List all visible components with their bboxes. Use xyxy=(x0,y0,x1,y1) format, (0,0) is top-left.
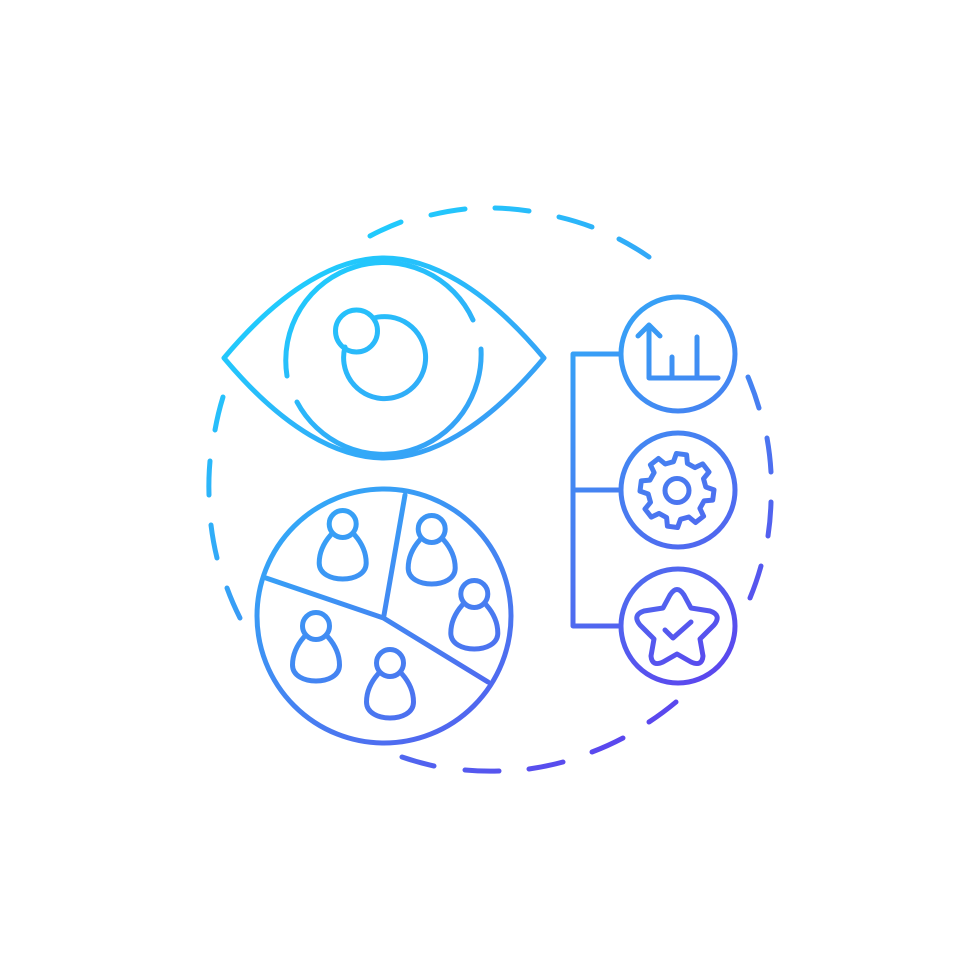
icon: gear badge xyxy=(621,433,735,547)
pie dividers xyxy=(266,495,488,682)
pie outline xyxy=(257,489,511,743)
eye outline xyxy=(224,258,544,458)
icon: star badge xyxy=(621,569,735,683)
person 3 xyxy=(451,580,498,649)
pie chart of people segments xyxy=(257,489,511,743)
iris lower arc xyxy=(297,349,481,454)
dashed outer circle xyxy=(209,208,771,771)
person 1 xyxy=(319,510,366,579)
check mark xyxy=(665,622,691,638)
person 2 xyxy=(408,516,455,584)
person 4 xyxy=(292,612,340,681)
icon: eye xyxy=(224,258,544,458)
pupil xyxy=(344,317,426,399)
connector bracket xyxy=(573,354,620,626)
iris upper arc xyxy=(286,263,473,376)
person 5 xyxy=(366,650,414,718)
star xyxy=(637,590,717,664)
pupil highlight xyxy=(336,310,378,352)
icon: growth chart badge xyxy=(621,297,735,411)
gear xyxy=(640,454,714,528)
